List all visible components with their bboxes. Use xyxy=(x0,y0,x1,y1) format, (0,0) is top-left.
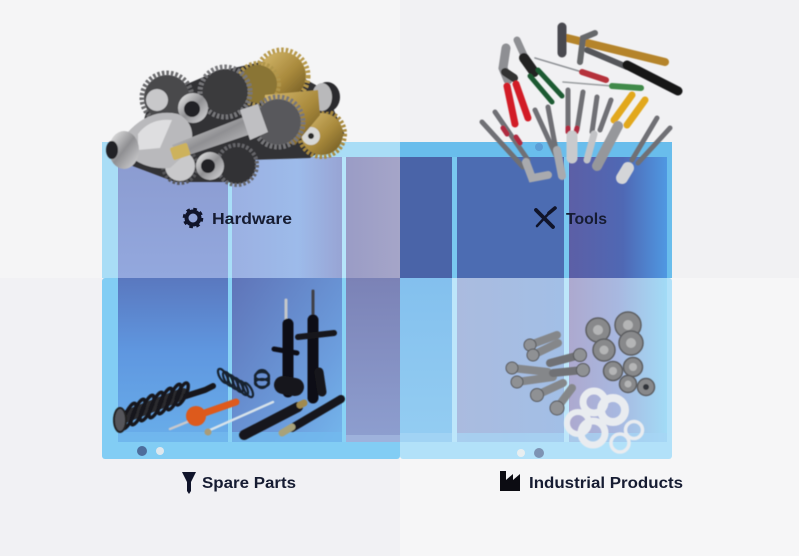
icon: pliers xyxy=(535,107,562,176)
icon: combination pliers xyxy=(568,90,583,158)
label: Spare Parts: Spare Parts xyxy=(202,475,296,492)
icon: green shears xyxy=(517,40,562,102)
label: Tools: Tools xyxy=(566,211,607,228)
icon: orange shock absorber xyxy=(170,402,273,436)
label: Hardware: Hardware xyxy=(212,211,292,228)
icon: front strut left xyxy=(274,300,297,392)
label: Hardware xyxy=(184,209,292,228)
icon: black damper cylinders xyxy=(244,399,341,435)
panel: blue divided tray xyxy=(102,142,672,459)
icon: crossed wrench and screwdriver xyxy=(536,208,555,227)
label: Industrial Products: Industrial Products xyxy=(529,475,683,492)
icon: red shears xyxy=(503,48,528,124)
icon: wooden hammer xyxy=(562,27,665,62)
icon: water pump pliers xyxy=(482,112,548,178)
illustration: suspension spare parts xyxy=(114,291,341,436)
label: Spare Parts xyxy=(182,472,296,494)
icon: front strut right xyxy=(298,291,334,398)
illustration: nuts, bolts and washers xyxy=(506,312,654,452)
icon: screw xyxy=(182,472,196,494)
label: Industrial Products xyxy=(500,471,683,492)
icon: factory xyxy=(500,471,520,491)
label: Tools xyxy=(536,208,607,228)
illustration: gearbox assembly xyxy=(106,50,345,185)
icon: bolt heads xyxy=(506,339,590,415)
icon: bolts xyxy=(512,335,583,408)
icon: washers xyxy=(567,391,642,452)
icon: coil strut xyxy=(114,381,213,432)
icon: small coil springs xyxy=(216,367,269,399)
icon: end cutting pliers xyxy=(622,118,670,178)
icon: needle nose pliers xyxy=(587,97,611,160)
icon: screwdrivers xyxy=(535,58,641,88)
illustration: hand tools xyxy=(482,27,678,178)
icon: gear xyxy=(184,209,202,227)
icon: black hammer xyxy=(580,33,678,91)
icon: nut holes xyxy=(593,320,649,390)
icon: flange nuts xyxy=(586,312,654,396)
icon: yellow shears xyxy=(597,95,645,166)
